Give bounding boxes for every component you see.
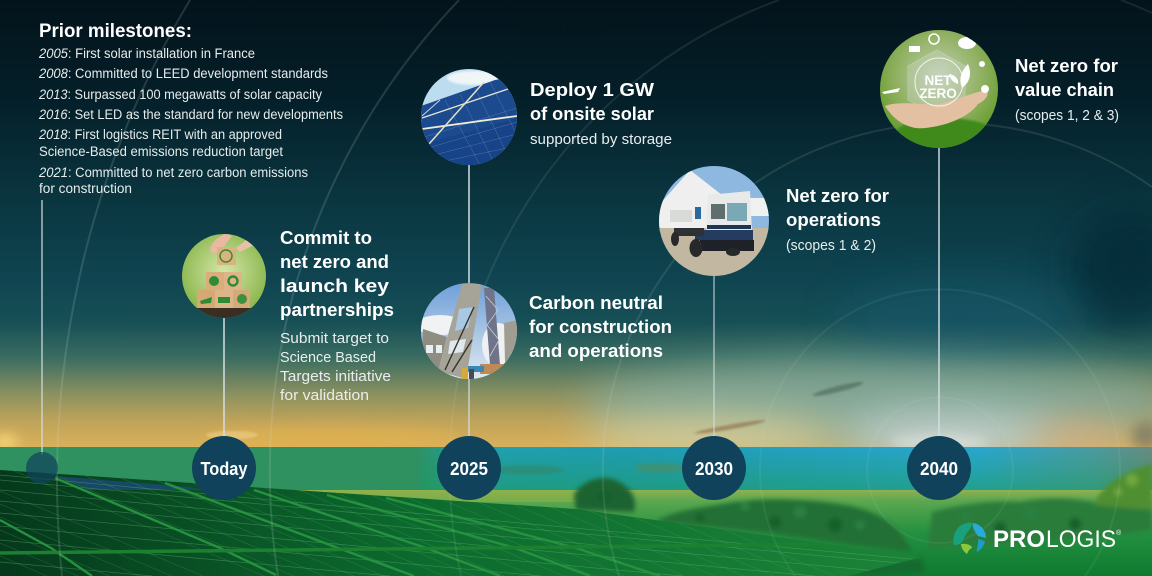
timeline marker: 2025 (437, 436, 501, 500)
photo: construction site (416, 283, 517, 379)
photo: net zero hand: NET (924, 73, 952, 88)
item: carbon neutral (529, 292, 672, 361)
milestone list (38, 46, 343, 196)
logo: Prologis: ® (1116, 529, 1122, 537)
item: net zero for value chain: Net zero for (1015, 55, 1118, 76)
item: deploy onsite solar: of onsite solar (530, 103, 654, 124)
timeline marker: 2030: 2030 (695, 459, 733, 479)
item: commit to net zero (280, 227, 394, 404)
tree line (574, 464, 1152, 576)
item: net zero for operations: (scopes 1 & 2) (786, 238, 876, 254)
prior milestones text block (38, 21, 343, 196)
item: commit to net zero: Submit target to (280, 331, 389, 347)
milestone list: Science-Based emissions reduction target (39, 144, 283, 159)
timeline start marker (26, 452, 58, 484)
icon: globe (953, 523, 986, 554)
milestone list: 2018: First logistics REIT with an approved (38, 127, 282, 142)
item: net zero for operations (786, 185, 889, 254)
logo: Prologis: PRO (993, 526, 1045, 553)
logo: Prologis: LOGIS (1046, 526, 1116, 553)
item: net zero for value chain (1015, 55, 1119, 124)
item: commit to net zero: partnerships (280, 299, 394, 320)
item: commit to net zero: launch key (280, 275, 390, 296)
heading: prior milestones: Prior milestones: (39, 21, 192, 42)
photo: net zero hand: ZERO (919, 86, 957, 101)
photo: wooden blocks (182, 233, 266, 320)
photo: yard truck (659, 166, 769, 276)
timeline marker: 2040: 2040 (920, 459, 958, 479)
logo: Prologis (953, 523, 1122, 554)
item: deploy onsite solar: Deploy 1 GW (530, 79, 655, 100)
milestone list: 2008: Committed to LEED development standards (38, 66, 328, 81)
item: commit to net zero: Targets initiative (280, 369, 391, 385)
milestone list: 2016: Set LED as the standard for new developments (38, 107, 343, 122)
photo: solar panels (421, 69, 517, 165)
timeline marker: Today: Today (200, 459, 248, 479)
item: commit to net zero: Science Based (280, 350, 376, 366)
timeline marker: 2025: 2025 (450, 459, 488, 479)
milestone list: for construction (39, 181, 132, 196)
item: carbon neutral: and operations (529, 340, 663, 361)
item: net zero for value chain: value chain (1015, 79, 1114, 100)
timeline marker: Today (192, 436, 256, 500)
item: carbon neutral: Carbon neutral (529, 292, 663, 313)
photo: net zero hand (880, 30, 998, 150)
stray label: Lorem ipsum: Lorem ipsum (525, 21, 601, 36)
horizon band (0, 447, 1152, 490)
item: commit to net zero: net zero and (280, 251, 389, 272)
item: deploy onsite solar (530, 79, 672, 148)
milestone list: 2021: Committed to net zero carbon emissions (38, 165, 308, 180)
item: carbon neutral: for construction (529, 316, 672, 337)
item: commit to net zero: Commit to (280, 227, 372, 248)
timeline marker: 2040 (907, 436, 971, 500)
timeline connector lines (42, 146, 939, 455)
item: commit to net zero: for validation (280, 388, 369, 404)
item: deploy onsite solar: supported by storage (530, 132, 672, 148)
item: net zero for operations: Net zero for (786, 185, 889, 206)
solar panels foreground (0, 465, 921, 576)
timeline marker: 2030 (682, 436, 746, 500)
item: net zero for operations: operations (786, 209, 881, 230)
item: net zero for value chain: (scopes 1, 2 & 3) (1015, 108, 1119, 124)
milestone list: 2013: Surpassed 100 megawatts of solar capacity (38, 87, 322, 102)
milestone list: 2005: First solar installation in France (38, 46, 255, 61)
